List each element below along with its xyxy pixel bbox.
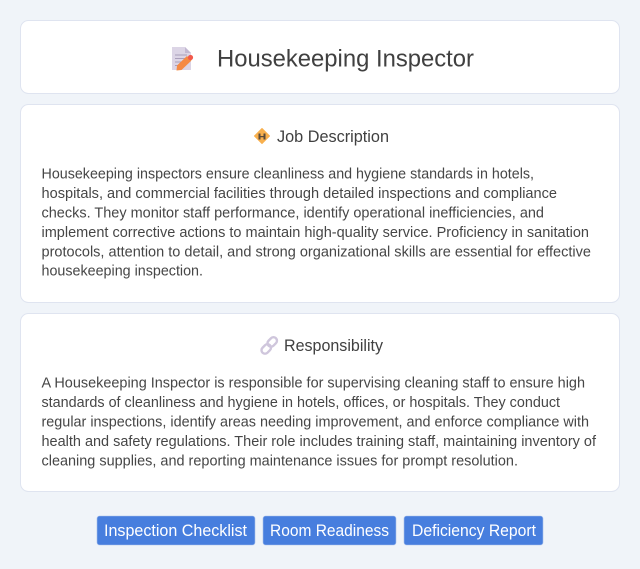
text block: job description: housekeeping inspection.: [42, 264, 203, 280]
text block: responsibility: health and safety regulations. Their role includes training staff, maintaining inventory of: [42, 434, 597, 450]
button: deficiency report: Deficiency Report: [412, 522, 536, 540]
icon: orange diamond sign: [254, 128, 270, 144]
text block: job description: implement corrective actions to maintain high-quality service. Proficiency in sanitation: [42, 225, 589, 241]
heading: page title: Housekeeping Inspector: [217, 46, 474, 72]
button: room readiness: Room Readiness: [270, 522, 389, 540]
panel: responsibility: [20, 314, 620, 492]
text block: job description: hospitals, and commercial facilities through detailed inspections and compliance: [42, 186, 557, 202]
panel: job description: [20, 104, 620, 302]
icon: chain link: [260, 336, 278, 355]
text block: job description: [42, 166, 591, 280]
button: room readiness: [263, 516, 396, 545]
button: deficiency report: [404, 516, 543, 545]
text block: responsibility: regular inspections, identify areas needing improvement, and enforce compliance with: [42, 414, 589, 430]
button: inspection checklist: [97, 516, 255, 545]
text block: job description: protocols, attention to detail, and strong organizational skills are essential for effective: [42, 244, 591, 260]
button: inspection checklist: Inspection Checklist: [104, 522, 247, 540]
text block: responsibility: [42, 376, 597, 470]
heading: responsibility: Responsibility: [284, 337, 384, 355]
text block: responsibility: standards of cleanliness and hygiene in hotels, offices, or hospitals. They conduct: [42, 395, 560, 411]
text block: responsibility: A Housekeeping Inspector is responsible for supervising cleaning staff to ensure high: [42, 376, 585, 392]
text block: job description: Housekeeping inspectors ensure cleanliness and hygiene standards in hotels,: [42, 166, 534, 182]
text block: responsibility: cleaning supplies, and reporting maintenance issues for prompt resolution.: [42, 454, 518, 470]
heading: job description: Job Description: [277, 128, 389, 146]
panel: title: [20, 20, 620, 94]
icon: document with pencil: [172, 47, 193, 70]
text block: job description: checks. They monitor staff performance, identify operational inefficiencies, and: [42, 206, 544, 222]
